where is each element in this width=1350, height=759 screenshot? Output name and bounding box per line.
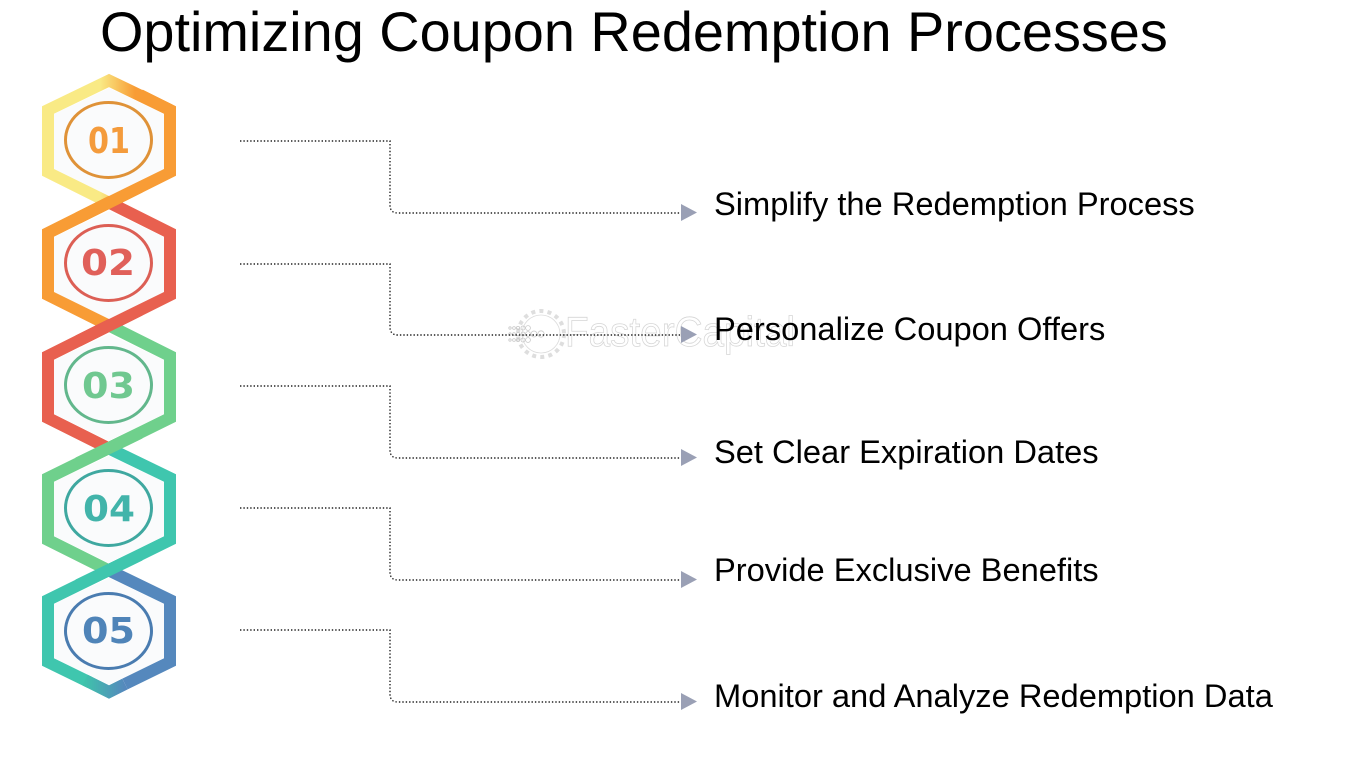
title: Optimizing Coupon Redemption Processes xyxy=(100,0,1168,63)
badge 03: 03 xyxy=(82,366,135,407)
label 04: Provide Exclusive Benefits xyxy=(714,551,1099,588)
badge 01 xyxy=(54,88,164,196)
badge 05 xyxy=(54,578,164,685)
badge 05: 05 xyxy=(82,611,135,652)
hexagon chain: interlaced ribbon xyxy=(48,80,170,692)
badge 04: 04 xyxy=(83,489,135,530)
label 01: Simplify the Redemption Process xyxy=(714,185,1195,222)
badge 02 xyxy=(54,211,164,319)
label 02: Personalize Coupon Offers xyxy=(714,310,1105,347)
label 05: Monitor and Analyze Redemption Data xyxy=(714,677,1274,714)
badge 03 xyxy=(54,334,164,441)
connector 01 xyxy=(240,141,697,221)
connector 02 xyxy=(240,264,697,343)
badge 02: 02 xyxy=(81,243,135,284)
connector 03 xyxy=(240,386,697,466)
label 03: Set Clear Expiration Dates xyxy=(714,433,1099,470)
watermark: FasterCapital: FasterCapital xyxy=(565,308,795,355)
connector 05 xyxy=(240,630,697,710)
connector 04 xyxy=(240,508,697,588)
badge 01: 01 xyxy=(88,121,130,162)
badge 04 xyxy=(54,456,164,563)
